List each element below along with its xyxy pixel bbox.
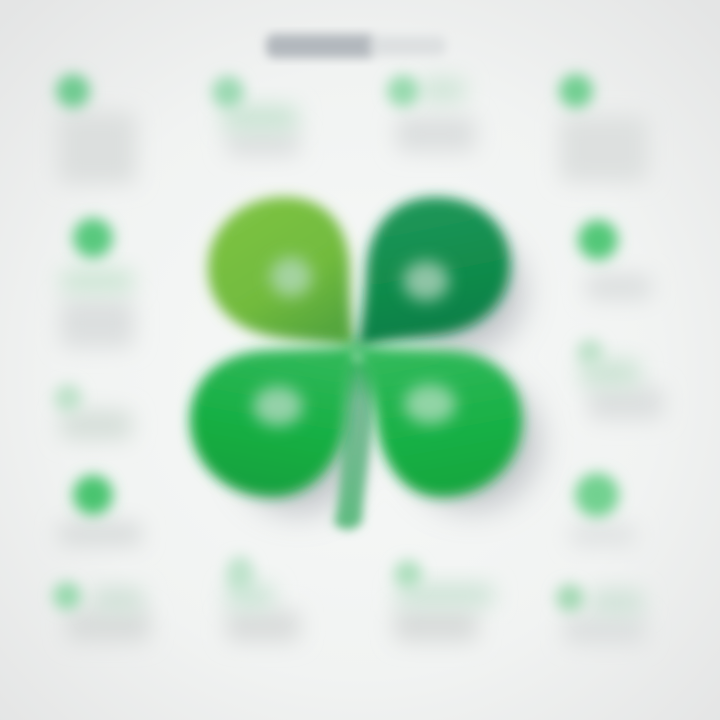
item: left 3 [58,475,142,546]
panel: top row items [56,74,648,184]
leaf: bottom left [190,344,360,497]
leaf: top right [356,197,510,352]
leaf: bottom right [352,344,522,497]
leaf: top left [208,197,356,350]
item: left 2 [54,384,132,440]
item: top 2 [212,76,300,156]
item: right 2 [577,339,664,420]
clover stem [334,360,378,530]
panel: bottom row items [53,556,646,644]
panel: right column items [570,220,664,546]
item: bottom 2 [226,556,300,642]
item: bottom 3 [394,560,494,642]
item: bottom 4 [556,584,646,644]
item: right 3 [570,473,636,546]
clover shadow [236,230,540,514]
item: top 3 [387,75,476,152]
panel: left column items [54,218,142,546]
icon: four-leaf clover [190,197,522,530]
title [266,34,446,58]
item: top 4 [559,74,648,182]
item: top 1 [56,74,136,184]
item: bottom 1 [53,582,150,642]
item: left 1 [60,218,134,348]
item: right 1 [578,220,652,300]
